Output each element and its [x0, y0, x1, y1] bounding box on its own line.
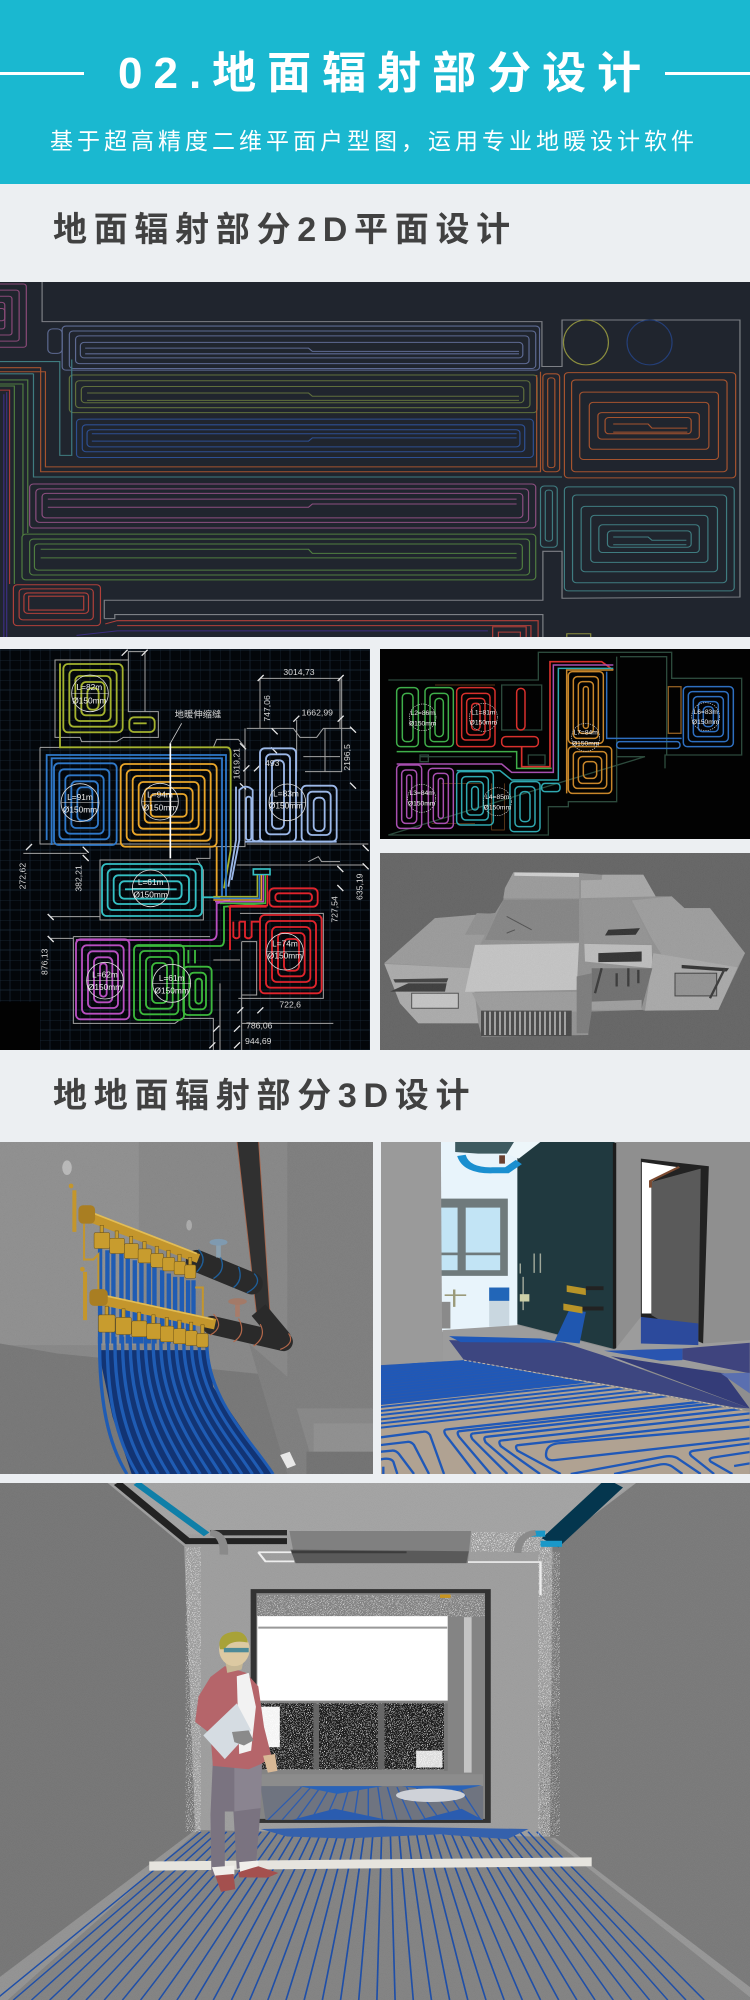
threshold white bar — [149, 1857, 592, 1871]
header banner — [0, 0, 750, 184]
white ticks — [26, 650, 369, 1048]
ceiling duct and blue pipe — [455, 1142, 540, 1170]
panel: 3D corridor with person and floor coils — [0, 1483, 750, 2000]
pipes — [381, 1360, 750, 1474]
brass bars — [82, 1214, 198, 1259]
coil: top left pink — [0, 284, 62, 353]
building — [384, 872, 745, 1037]
back room — [381, 1142, 750, 1474]
dimension text: 747,06 — [262, 695, 272, 722]
coil: orange — [567, 670, 613, 793]
wall manifold and floor behind — [442, 1285, 750, 1370]
wall outlines — [23, 652, 368, 1050]
coil: olive — [60, 663, 231, 888]
manifold assembly — [69, 1140, 291, 1349]
coil label text: Ø150mm — [269, 800, 303, 810]
subtitle: 基于超高精度二维平面户型图，运用专业地暖设计软件 — [50, 128, 698, 154]
expansion joint — [170, 709, 221, 858]
coil label text: Ø150mm — [572, 740, 600, 747]
dimension text: 272,62 — [17, 863, 27, 889]
coil: olive long — [69, 375, 537, 413]
coil: small red and bottom lines — [13, 585, 538, 644]
coil label text: L=62m — [92, 970, 118, 980]
coil: teal — [0, 360, 734, 591]
walls outline — [42, 282, 740, 637]
coil: teal — [102, 864, 270, 916]
panel: 3D room render with floor coils — [381, 1142, 750, 1474]
coil label text: Ø150mm — [692, 719, 720, 726]
dimension text: 382,21 — [74, 865, 84, 892]
dimension text: 1662,99 — [302, 707, 333, 717]
coil label text: L4=85m — [485, 794, 510, 801]
dimension text: 876,13 — [39, 948, 49, 975]
coil label text: L=61m — [138, 877, 164, 887]
coil: pale blue — [228, 748, 337, 887]
dimension text: 2196,5 — [342, 744, 352, 771]
coil label text: L3=84m — [410, 790, 434, 797]
coil label text: Ø150mm — [134, 889, 168, 899]
coil label text: L=94m — [147, 789, 173, 799]
dimension text: 3014,73 — [283, 667, 315, 677]
dimension text: 493 — [265, 758, 280, 768]
ceiling ducts and AC unit — [117, 1483, 615, 1595]
upper fittings — [94, 1225, 196, 1278]
coil label text — [63, 682, 303, 995]
dimension text: 1619,21 — [231, 748, 241, 779]
coil label text: Ø150mm — [470, 720, 497, 727]
coil label text: Ø150mm — [88, 982, 122, 992]
coil label text: Ø150mm — [72, 695, 107, 705]
panel: 3D point cloud building — [380, 853, 750, 1050]
window floor coils — [261, 1785, 483, 1820]
coil: teal — [457, 668, 613, 832]
expansion joint: 地暖伸缩缝 — [175, 709, 221, 720]
panel: CAD heating plan with dimensions — [0, 649, 370, 1050]
dimension text: 786,06 — [246, 1021, 273, 1031]
side vents — [74, 1190, 85, 1320]
black insulation — [197, 1261, 252, 1284]
coil label text: L1=81m — [471, 710, 496, 717]
edge speckle — [186, 1533, 560, 1835]
main title: 02.地面辐射部分设计 — [118, 49, 652, 98]
coil: blue — [607, 672, 733, 748]
coil label text: Ø150mm — [155, 985, 189, 995]
dimension text: 722,6 — [279, 999, 301, 1009]
coil: blue long — [77, 419, 533, 457]
section heading: 2D design: 地面辐射部分2D平面设计 — [53, 211, 517, 249]
floor coil — [381, 1327, 750, 1474]
coil labels — [408, 703, 720, 816]
blue patches at threshold — [261, 1827, 529, 1839]
coil: pink long — [30, 484, 536, 528]
section heading: 3D design: 地地面辐射部分3D设计 — [53, 1077, 476, 1115]
coil: green — [134, 903, 263, 1020]
coil: blue-grey long — [62, 326, 540, 370]
coil: purple — [397, 665, 613, 828]
dense far coil tone — [381, 1360, 587, 1405]
manifold bundle — [213, 875, 267, 906]
dimension text: 944,69 — [245, 1036, 272, 1046]
coil label text: Ø150mm — [268, 950, 302, 960]
dimension text: 635,19 — [355, 873, 365, 900]
drain pipe — [237, 1140, 270, 1317]
coil label text: Ø150mm — [484, 804, 511, 811]
coil label text: L=83m — [273, 789, 299, 799]
blue pipe bundle lower — [98, 1337, 273, 1474]
coil label text — [408, 709, 720, 811]
panel: full-width 2D floor heating plan — [0, 282, 750, 637]
coil: red — [457, 662, 613, 767]
coil label text: L6=83m — [694, 709, 718, 716]
gate bars — [485, 1012, 565, 1035]
coil label text: Ø150mm — [408, 800, 436, 807]
coil: blue — [47, 755, 226, 897]
coil label text: L2=86m — [411, 710, 435, 717]
panel: coloured CAD plan on black — [380, 649, 750, 839]
header left rule — [0, 72, 84, 75]
panel: 3D manifold on wall — [0, 1142, 373, 1474]
coil label text: L7=84m — [574, 730, 598, 737]
lower fittings — [98, 1306, 208, 1347]
coil: magenta — [76, 900, 230, 1019]
person with clipboard — [195, 1632, 278, 1892]
window frame — [254, 1591, 488, 1821]
coil label text: Ø150mm — [143, 803, 177, 813]
wall — [0, 1142, 373, 1474]
wall outlines — [388, 652, 742, 835]
coil label text: Ø150mm — [409, 721, 437, 728]
coil: orange wrap — [0, 368, 736, 478]
upper blue pipes — [100, 1247, 193, 1343]
coil label text: L=91m — [67, 792, 93, 802]
coil label text: Ø150mm — [63, 805, 97, 815]
dark wedge of far coil — [449, 1340, 750, 1408]
coil labels — [61, 675, 306, 1002]
coil: green pair — [397, 688, 552, 768]
header right rule — [665, 72, 750, 75]
room shell — [0, 1483, 750, 2000]
dimension text — [17, 667, 365, 1046]
coil: green long — [0, 380, 536, 580]
connectors — [84, 1224, 203, 1317]
coil: orange — [121, 764, 217, 897]
coil label text: L=61m — [159, 973, 185, 983]
coil label text: L=74m — [272, 939, 298, 949]
dimension text: 727,54 — [329, 896, 339, 923]
coil: red — [228, 888, 322, 993]
coil label text: L=82m — [76, 682, 102, 692]
valves — [212, 1245, 226, 1258]
floor heating pipes — [0, 1832, 704, 2000]
coil: left risers — [0, 386, 14, 637]
